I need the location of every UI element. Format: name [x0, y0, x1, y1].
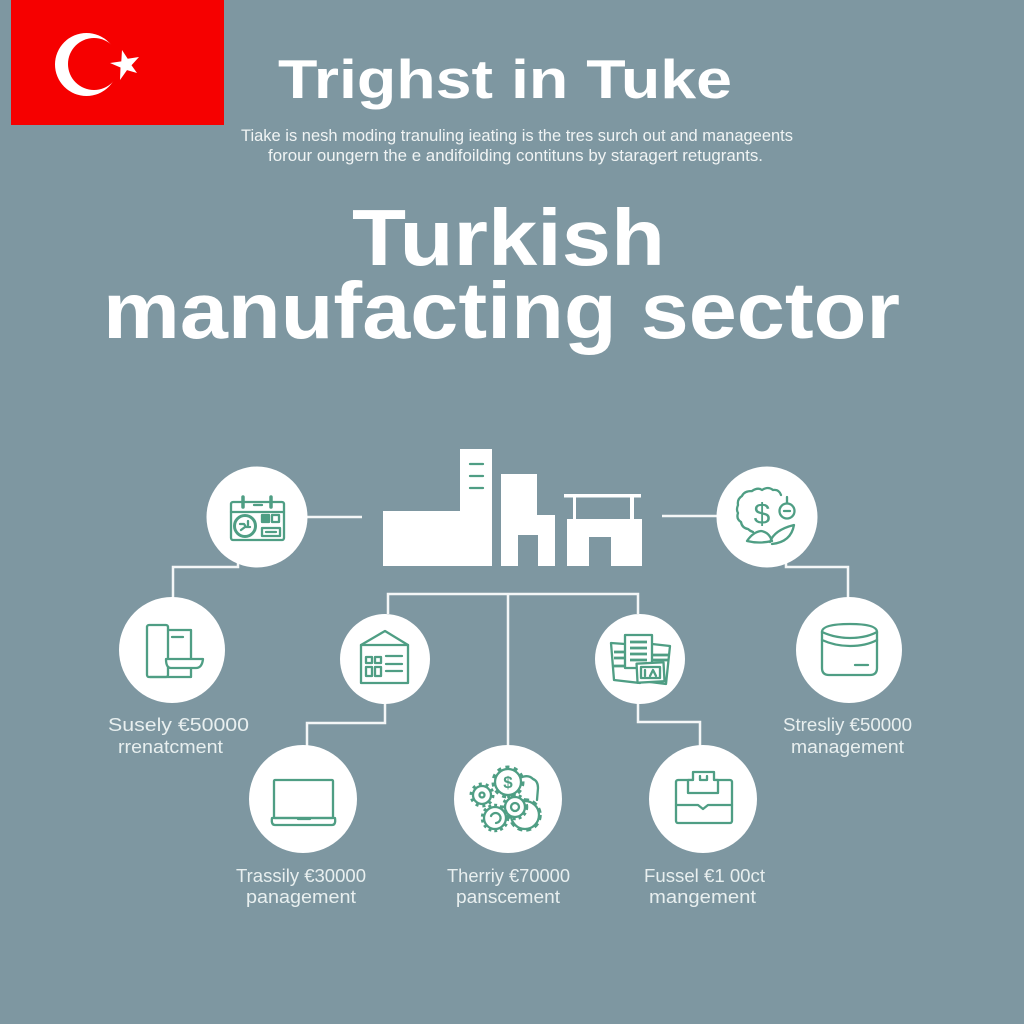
label: mangement [649, 887, 756, 907]
label [783, 715, 912, 757]
label: Stresliy €50000 [783, 715, 912, 735]
label [644, 866, 765, 907]
connector lines [173, 516, 848, 746]
label: Trassily €30000 [236, 866, 366, 886]
icon: tablet and tray [147, 625, 203, 677]
label: panscement [456, 887, 560, 907]
node: storage [783, 597, 912, 757]
icon: briefcase [676, 772, 732, 823]
node: gears [447, 745, 570, 907]
icon: factory [383, 449, 642, 566]
intro text: forour oungern the e andifoilding contituns by staragert retugrants. [268, 146, 763, 165]
node: calendar [206, 466, 308, 568]
icon: laptop [272, 780, 335, 825]
main heading: manufacting sector [103, 266, 900, 355]
icon: storage drum [822, 624, 877, 675]
title: Trighst in Tuke [278, 48, 732, 110]
label [236, 866, 366, 907]
main heading: Turkish [352, 193, 665, 282]
icon: gears: $ [503, 773, 513, 792]
icon: Turkish flag [11, 0, 224, 125]
node: tablet [108, 597, 249, 757]
intro text: Tiake is nesh moding tranuling ieating is the tres surch out and manageents [241, 126, 793, 145]
label: rrenatcment [118, 737, 223, 757]
node: finance [716, 466, 818, 568]
label: Susely €50000 [108, 715, 249, 735]
intro text [241, 126, 793, 165]
icon: gears [471, 767, 540, 831]
label: management [791, 737, 904, 757]
node: documents [595, 614, 685, 704]
label: Therriy €70000 [447, 866, 570, 886]
label [108, 715, 249, 757]
node: briefcase [644, 745, 765, 907]
icon: dollar coin and leaves: $ [754, 498, 771, 531]
main heading [103, 193, 900, 355]
icon: warehouse [361, 631, 408, 683]
label: panagement [246, 887, 356, 907]
node: warehouse [340, 614, 430, 704]
icon: calendar [231, 497, 284, 540]
node: laptop [236, 745, 366, 907]
label: Fussel €1 00ct [644, 866, 765, 886]
label [447, 866, 570, 907]
icon: documents [611, 635, 670, 684]
